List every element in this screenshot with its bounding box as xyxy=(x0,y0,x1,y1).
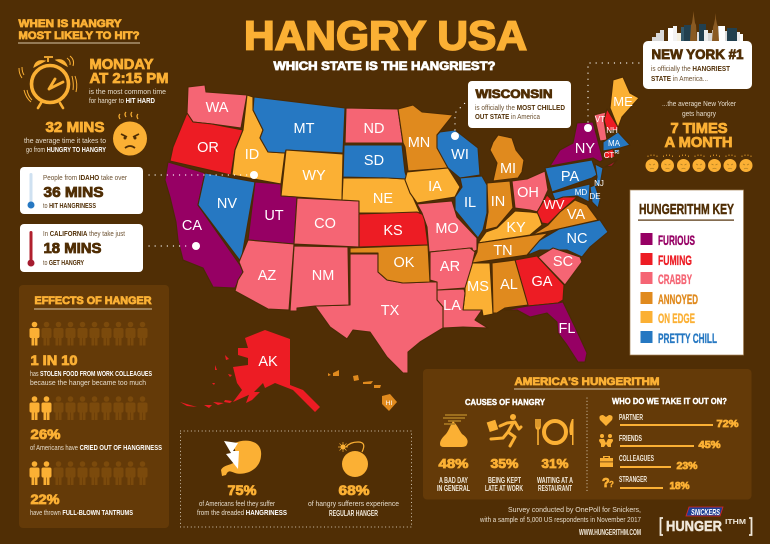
state abbreviations: OR xyxy=(197,140,219,156)
icon: bomb xyxy=(338,442,368,477)
text: 7 times a month: 7 TIMES xyxy=(670,121,728,137)
state abbreviations: MA xyxy=(608,139,621,148)
state abbreviations: NV xyxy=(217,196,237,212)
heading: causes of hangry: CAUSES OF HANGRY xyxy=(465,397,545,407)
state: North Carolina xyxy=(528,220,608,257)
state abbreviations: NY xyxy=(575,141,595,157)
state abbreviations: NJ xyxy=(594,179,604,188)
card: Wisconsin xyxy=(468,81,571,128)
bar: stranger 18%: ? xyxy=(609,480,614,489)
icon: bad day pile xyxy=(440,415,468,447)
state abbreviations: WI xyxy=(451,147,469,163)
state abbreviations: TN xyxy=(493,243,513,259)
stat: 1 in 10: 1 IN 10 xyxy=(30,353,78,368)
state: Texas xyxy=(315,254,443,373)
stat: 22% xyxy=(30,492,133,517)
state: Oregon xyxy=(170,113,243,175)
card: idaho: People from IDAHO take over xyxy=(43,173,127,182)
card: california: to GET HANGRY xyxy=(43,258,84,267)
pictogram row: 22% xyxy=(30,461,148,485)
state: Vermont xyxy=(594,112,607,141)
stats: causes of hangry: IN GENERAL xyxy=(437,484,470,493)
stat: 68%: REGULAR HANGER xyxy=(329,509,378,518)
stat: 75%: of Americans feel they suffer xyxy=(199,499,275,508)
state: Michigan xyxy=(490,135,524,181)
stat: 1 in 10: has STOLEN FOOD FROM WORK COLLEAGUES xyxy=(30,369,152,378)
state: New York xyxy=(550,122,603,166)
card: california: In CALIFORNIA they take just xyxy=(43,229,126,238)
card: Wisconsin: WISCONSIN xyxy=(476,89,552,101)
state: Illinois xyxy=(455,176,487,238)
bar: stranger 18%: ? xyxy=(602,476,610,490)
panel: effects of hanger xyxy=(19,285,169,528)
logo: Snickers Hungerithm: ITHM xyxy=(725,519,746,526)
stats: causes of hangry: A BAD DAY xyxy=(439,476,468,485)
logo: Snickers Hungerithm xyxy=(660,507,752,535)
state: South Dakota xyxy=(343,145,407,179)
state abbreviations: MI xyxy=(500,161,516,177)
card: New York xyxy=(643,41,752,89)
text: monday at 2:15 pm: AT 2:15 PM xyxy=(90,71,168,87)
pictogram row: 1 in 10 xyxy=(30,322,148,346)
state: Montana xyxy=(253,97,345,153)
state abbreviations: ND xyxy=(364,121,384,137)
panel: America's hungerithm xyxy=(423,369,752,500)
bar: partner 72% xyxy=(599,413,739,430)
card: idaho xyxy=(20,167,143,214)
state: Colorado xyxy=(294,198,359,247)
bar: colleagues 23%: 23% xyxy=(676,460,698,472)
stat: 26% xyxy=(30,427,162,452)
stat: 1 in 10 xyxy=(30,353,152,387)
bar: stranger 18% xyxy=(602,475,690,492)
state abbreviations: IN xyxy=(491,194,505,210)
icon: running late xyxy=(487,414,521,446)
state abbreviations: MT xyxy=(294,121,315,137)
state: Long Island xyxy=(605,160,617,167)
callout line: California xyxy=(149,242,200,250)
state: Minnesota xyxy=(398,105,453,171)
text: monday at 2:15 pm: for hanger to HIT HARD xyxy=(89,96,155,105)
bar: partner 72%: 72% xyxy=(716,418,739,430)
panel: dotted stats box xyxy=(180,431,412,527)
footer: survey credit: with a sample of 5,000 US respondents in November 2017 xyxy=(479,515,641,524)
heading: who do we take it out on: WHO DO WE TAKE IT OUT ON? xyxy=(612,396,727,406)
card: Wisconsin: is officially the MOST CHILLED xyxy=(475,103,565,112)
state: Hawaii xyxy=(328,370,397,411)
stat: 75%: 75% xyxy=(228,483,256,498)
stats: causes of hangry: 35% xyxy=(490,456,519,471)
state: Nebraska xyxy=(342,178,420,213)
state: Louisiana xyxy=(437,289,488,328)
state: Florida xyxy=(505,302,587,362)
state abbreviations: SD xyxy=(364,153,384,169)
text: 32 mins: the average time it takes to xyxy=(24,136,106,145)
state abbreviations: AZ xyxy=(258,268,276,284)
stats: causes of hangry: 31% xyxy=(542,456,569,471)
bar: friends 45% xyxy=(599,434,721,451)
stat: 68% xyxy=(308,483,399,518)
text: 7 times a month: A MONTH xyxy=(664,135,732,151)
map of the USA by hungerithm xyxy=(165,77,639,373)
bar: friends 45%: FRIENDS xyxy=(619,434,642,443)
callout line: New York xyxy=(584,63,640,132)
text: 7 times a month: ...the average New Yorker xyxy=(662,99,736,108)
stat: 68%: of hangry sufferers experience xyxy=(308,499,399,508)
state abbreviations: FL xyxy=(559,321,575,337)
state abbreviations: WY xyxy=(302,168,326,184)
icon: New York skyline xyxy=(652,11,743,41)
icon: alarm clock xyxy=(19,56,77,108)
stats: causes of hangry xyxy=(437,456,573,493)
state: Tennessee xyxy=(472,233,548,263)
state: Indiana xyxy=(485,181,513,230)
state: Maryland xyxy=(552,184,590,202)
card: california: 18 MINS xyxy=(44,241,102,257)
state abbreviations: GA xyxy=(532,274,553,290)
title: HANGRY USA xyxy=(244,12,527,58)
state abbreviations: KS xyxy=(383,223,403,239)
panel: hungerithm key: HUNGERITHM KEY xyxy=(639,202,734,218)
state: West Virginia xyxy=(537,195,577,224)
panel: hungerithm key: CRABBY xyxy=(658,271,692,287)
state abbreviations: KY xyxy=(506,220,526,236)
state: New Mexico xyxy=(290,246,349,311)
state: Alaska: AK xyxy=(258,354,278,370)
footer: survey credit: WWW.HUNGERITHM.COM xyxy=(579,528,641,537)
stats: causes of hangry: BEING KEPT xyxy=(488,476,521,485)
state: Arizona xyxy=(235,240,294,310)
state abbreviations: MS xyxy=(467,279,489,295)
state abbreviations: ME xyxy=(613,94,633,109)
stats: causes of hangry: LATE AT WORK xyxy=(485,484,523,493)
card: idaho: 36 MINS xyxy=(44,185,104,201)
state: California xyxy=(165,162,243,288)
stat: 26%: of Americans have CRIED OUT OF HANGRINESS xyxy=(30,443,162,452)
logo: Snickers Hungerithm: SNICKERS xyxy=(691,507,720,517)
state abbreviations: OK xyxy=(394,255,415,271)
state: Kentucky xyxy=(478,211,542,243)
stats: causes of hangry: WAITING AT A xyxy=(537,476,573,485)
icon: stomach with lightning bolt xyxy=(221,441,261,476)
state: Washington xyxy=(187,85,247,128)
state abbreviations: CO xyxy=(314,216,336,232)
heading: when is hangry most likely to hit: MOST LIKELY TO HIT? xyxy=(18,30,140,42)
state abbreviations: NM xyxy=(312,268,334,284)
state: Missouri xyxy=(417,201,477,252)
stats: causes of hangry: RESTAURANT xyxy=(538,484,572,493)
state abbreviations: WV xyxy=(544,197,565,212)
state: Wyoming xyxy=(281,150,343,200)
state: Ohio xyxy=(512,171,548,212)
bar: friends 45%: 45% xyxy=(698,439,721,451)
callout line: Wisconsin xyxy=(451,103,465,140)
state abbreviations: VA xyxy=(567,207,585,223)
state abbreviations: PA xyxy=(561,169,579,185)
state abbreviations: LA xyxy=(443,298,461,314)
heading: when is hangry most likely to hit: WHEN IS HANGRY xyxy=(18,18,122,30)
stat: 22%: 22% xyxy=(30,492,60,507)
stat: 75% xyxy=(197,483,287,517)
state abbreviations: MO xyxy=(435,221,459,237)
state: Alabama xyxy=(492,260,528,313)
bar: stranger 18%: 18% xyxy=(670,480,690,492)
state abbreviations: NC xyxy=(567,231,587,247)
card: Wisconsin: OUT STATE in America xyxy=(475,112,541,121)
state: Hawaii: HI xyxy=(386,400,392,407)
text: 7 times a month xyxy=(662,99,736,151)
state abbreviations: CA xyxy=(182,218,202,234)
state abbreviations: MD xyxy=(575,188,587,197)
state: New Hampshire xyxy=(604,109,618,131)
state: Rhode Island xyxy=(613,149,620,154)
state abbreviations: SC xyxy=(553,254,573,270)
panel: hungerithm key: ANNOYED xyxy=(658,291,698,307)
card: california xyxy=(20,224,143,272)
card: New York: is officially the HANGRIEST xyxy=(651,64,730,73)
state: Connecticut xyxy=(604,149,615,159)
state: Wisconsin xyxy=(437,130,480,178)
panel: effects of hanger: EFFECTS OF HANGER xyxy=(34,295,152,307)
title: WHICH STATE IS THE HANGRIEST? xyxy=(274,61,496,73)
stat: 1 in 10: because the hanger became too much xyxy=(30,378,146,387)
state abbreviations: DE xyxy=(589,192,601,201)
stat: 26%: 26% xyxy=(30,427,60,442)
state abbreviations: UT xyxy=(264,208,284,224)
state abbreviations xyxy=(182,94,633,337)
text: 32 mins: 32 MINS xyxy=(46,120,105,136)
text: monday at 2:15 pm: MONDAY xyxy=(90,57,154,73)
panel: hungerithm key: PRETTY CHILL xyxy=(658,330,717,346)
state abbreviations: AR xyxy=(440,259,460,275)
bar: colleagues 23% xyxy=(600,454,698,472)
state abbreviations: WA xyxy=(206,100,229,116)
state abbreviations: ID xyxy=(245,147,259,163)
stat: 22%: have thrown FULL-BLOWN TANTRUMS xyxy=(30,508,133,517)
state: Georgia xyxy=(515,256,564,306)
footer: survey credit: Survey conducted by OnePoll for Snickers, xyxy=(508,505,641,514)
card: idaho: to HIT HANGRINESS xyxy=(43,201,96,210)
state: Idaho xyxy=(232,95,285,184)
state: Delaware xyxy=(590,185,600,208)
state: Utah xyxy=(248,182,297,244)
state: Mississippi xyxy=(463,263,493,316)
state abbreviations: RI xyxy=(614,150,620,156)
icon: plate and cutlery xyxy=(536,419,574,445)
icons: seven angry faces xyxy=(646,154,752,172)
state: Oklahoma xyxy=(350,245,430,283)
state abbreviations: CT xyxy=(604,151,614,160)
text: monday at 2:15 pm: is the most common time xyxy=(89,87,166,96)
state: Maine xyxy=(610,77,639,128)
stat: 75%: from the dreaded HANGRINESS xyxy=(197,508,287,517)
state: Alaska xyxy=(180,330,320,412)
state abbreviations: NE xyxy=(373,191,393,207)
card: New York: STATE in America... xyxy=(651,74,708,83)
state: South Carolina xyxy=(538,248,582,285)
panel: hungerithm key: FUMING xyxy=(658,252,692,268)
footer: survey credit xyxy=(479,505,641,537)
panel: hungerithm key: FURIOUS xyxy=(658,232,695,248)
state: New Jersey xyxy=(595,164,603,187)
state abbreviations: IA xyxy=(428,179,442,195)
state abbreviations: OH xyxy=(517,185,539,201)
state abbreviations: TX xyxy=(381,303,400,319)
panel: hungerithm key xyxy=(630,190,744,355)
state abbreviations: IL xyxy=(464,195,476,211)
bar: stranger 18%: STRANGER xyxy=(619,475,647,484)
state: Arkansas xyxy=(430,248,475,290)
bar: colleagues 23%: COLLEAGUES xyxy=(619,454,654,463)
logo: Snickers Hungerithm: HUNGER xyxy=(666,518,722,535)
state abbreviations: NH xyxy=(606,126,618,135)
state: Virginia xyxy=(532,200,598,235)
state: Massachusetts xyxy=(603,132,630,151)
heading: when is hangry most likely to hit xyxy=(18,18,140,44)
state abbreviations: MN xyxy=(408,135,430,151)
text: monday at 2:15 pm xyxy=(89,57,168,105)
pictogram row: 26% xyxy=(30,396,148,420)
state: North Dakota xyxy=(345,108,403,143)
state: Kansas xyxy=(359,212,428,247)
stats: causes of hangry: 48% xyxy=(438,456,469,471)
text: 7 times a month: gets hangry xyxy=(682,109,716,118)
state: Nevada xyxy=(198,173,255,262)
stat: 68%: 68% xyxy=(338,483,370,498)
text: 32 mins xyxy=(24,120,106,154)
state abbreviations: AL xyxy=(500,277,518,293)
bar: partner 72%: PARTNER xyxy=(619,413,643,422)
card: New York: NEW YORK #1 xyxy=(652,47,744,62)
state: Pennsylvania xyxy=(545,160,597,192)
icon: angry face xyxy=(113,112,147,156)
state abbreviations: VT xyxy=(595,115,605,124)
panel: hungerithm key: ON EDGE xyxy=(658,310,695,326)
state: Iowa xyxy=(405,168,460,203)
callout line: Idaho xyxy=(149,171,258,179)
text: 32 mins: go from HUNGRY TO HANGRY xyxy=(26,145,106,154)
panel: America's hungerithm: AMERICA'S HUNGERITHM xyxy=(514,376,660,388)
